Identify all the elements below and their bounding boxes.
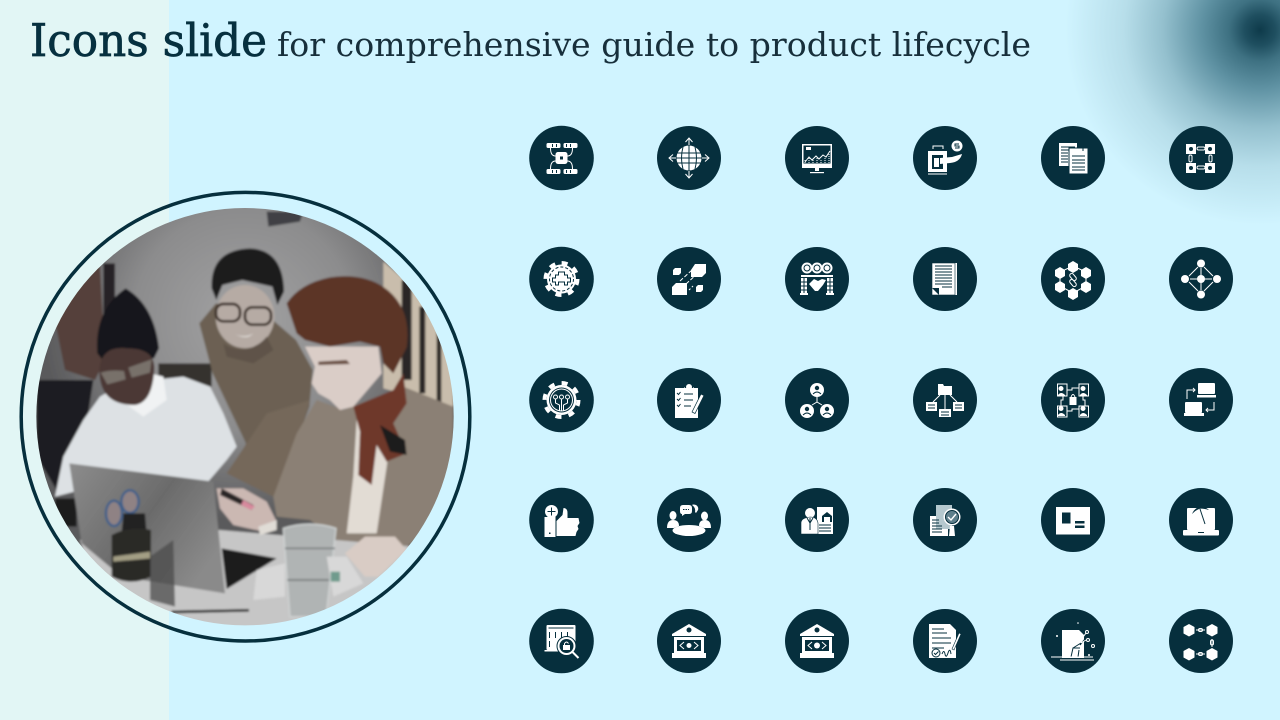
water glass	[283, 524, 336, 617]
icon: signed contract with pen	[913, 609, 977, 673]
icon: clipboard checklist with pencil	[657, 368, 721, 432]
icon: code window with lock magnifier	[529, 609, 594, 673]
icon: globe with four arrows	[657, 126, 721, 190]
top-right dark glow	[1065, 0, 1280, 225]
icon: document with reclining figure and circuit	[1041, 609, 1105, 673]
icon: monitor with line chart	[785, 126, 849, 190]
icon: bank with banknote	[785, 609, 849, 673]
icon: shopping bag, hand and coin	[913, 126, 977, 190]
woman in the knit sweater	[199, 248, 313, 497]
background clutter	[37, 263, 212, 527]
left pale strip	[0, 0, 169, 720]
icon: node diagram	[1169, 247, 1233, 311]
icon: chained blocks	[1169, 126, 1233, 190]
laptop	[69, 463, 277, 593]
icon: bank with gear banknote	[657, 609, 721, 673]
icon: ring of cubes with link	[1041, 247, 1105, 311]
photo: three women working around a laptop	[30, 203, 463, 630]
icon: two laptops exchanging data	[1169, 368, 1233, 432]
icon: team meeting around table	[657, 488, 721, 552]
wooden slats	[383, 262, 453, 408]
icon: laptop with pickaxe	[1169, 488, 1233, 552]
icon: folder hierarchy	[913, 368, 977, 432]
icon: layout card	[1041, 488, 1105, 552]
woman in the blazer with scarf	[273, 276, 453, 547]
icon: currency coins over handshake	[785, 247, 849, 311]
papers and resting hand	[253, 537, 407, 600]
icon: documents with approval magnifier	[913, 488, 977, 552]
icon: clipped documents	[1041, 126, 1105, 190]
icon: thumbs up with plus	[529, 488, 594, 552]
icon: connected cubes	[657, 247, 721, 311]
title: for comprehensive guide to product lifecycle	[277, 25, 1031, 64]
icon: text document	[913, 247, 977, 311]
pen holder with scissors	[106, 490, 175, 607]
icon: woman with property document	[785, 488, 849, 552]
title: Icons slide	[30, 14, 267, 67]
icon: secure people network	[1041, 368, 1105, 432]
icon: four linked hexagons	[1169, 609, 1233, 673]
title	[30, 14, 1031, 67]
table	[80, 530, 413, 630]
wall	[36, 208, 454, 550]
photo ring	[21, 192, 470, 641]
icon: gear with puzzle piece	[529, 247, 594, 311]
icon: three connected people	[785, 368, 849, 432]
woman in the white shirt	[55, 288, 237, 497]
icon: network hub	[529, 126, 594, 190]
icon: gear with circuit	[529, 368, 594, 432]
pointing hand and highlighter	[217, 488, 277, 535]
pen on table	[172, 609, 249, 613]
